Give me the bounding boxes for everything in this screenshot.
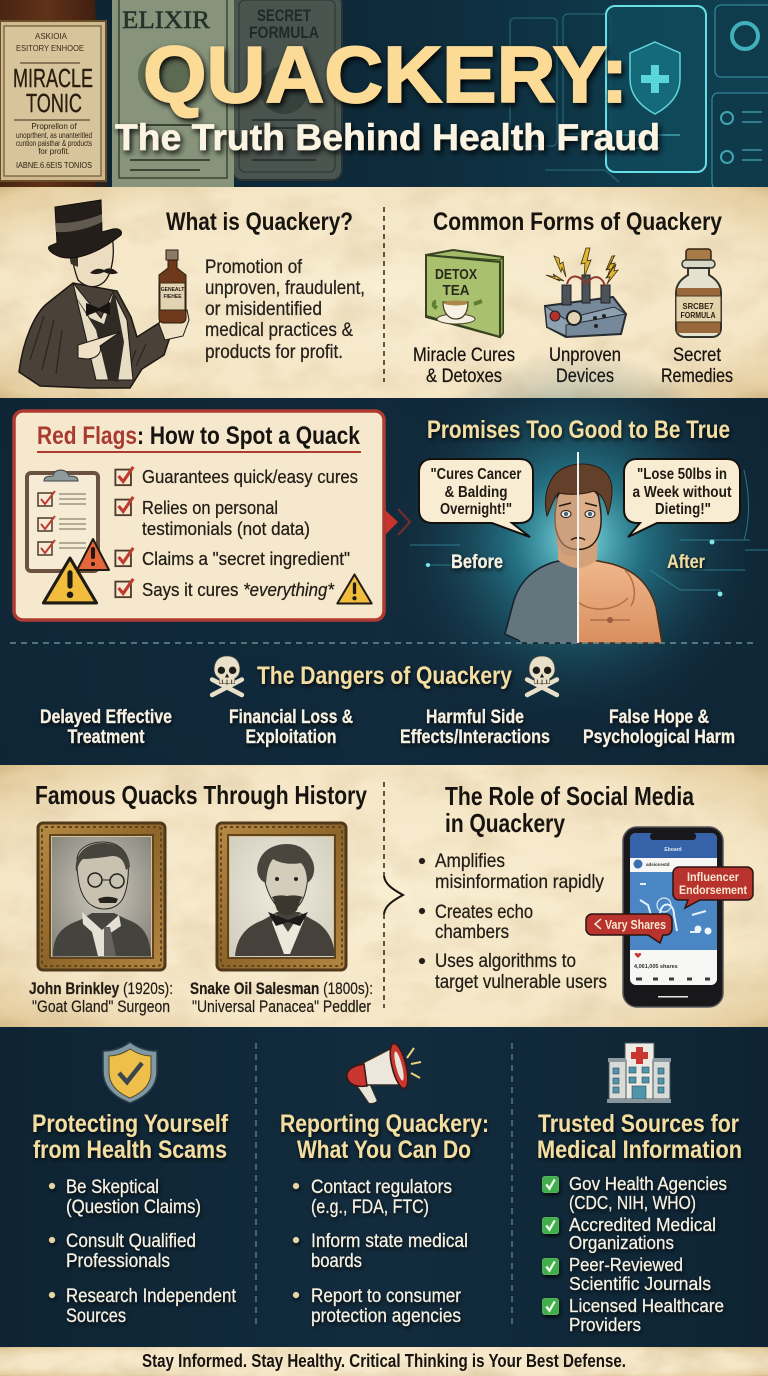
bottle: miracle tonic: IABNE.6.6EIS TONIOS (16, 161, 92, 170)
label: miracle cures: Miracle Cures (413, 344, 515, 366)
phone mockup: 4,061,005 shares (634, 964, 678, 970)
icon: top-hatted salesman holding tonic (19, 200, 189, 388)
social media bullets (419, 851, 607, 993)
trusted sources list: Scientific Journals (569, 1273, 711, 1294)
protection list: Research Independent (66, 1286, 237, 1307)
column: trusted sources (537, 1043, 742, 1335)
trusted sources list: Organizations (569, 1232, 674, 1253)
heading: red flags: Red Flags (37, 422, 137, 450)
bottle: miracle tonic: ESITORY ENHOOE (16, 44, 84, 53)
checklist: Says it cures *everything* (142, 579, 335, 600)
footer banner (0, 1347, 768, 1376)
reporting list: (e.g., FDA, FTC) (311, 1197, 429, 1218)
label: secret remedies: Secret (673, 344, 721, 366)
heading: common forms: Common Forms of Quackery (433, 208, 722, 236)
figure: before and after man (505, 464, 662, 643)
label: unproven devices (549, 344, 621, 387)
heading: what is quackery: What is Quackery? (166, 208, 353, 236)
speech bubble: after claim: Dieting!" (655, 501, 711, 518)
definition text: unproven, fraudulent, (205, 278, 365, 299)
icon: secret formula jar: FORMULA (680, 311, 716, 320)
definition text: medical practices & (205, 320, 353, 341)
label: secret remedies (661, 344, 733, 387)
trusted sources list: Providers (569, 1314, 641, 1335)
icon: tonic bottle: GENEALT (161, 287, 184, 293)
speech bubble: after claim: "Lose 50lbs in (637, 466, 727, 483)
heading: dangers: The Dangers of Quackery (257, 662, 512, 690)
card: red flags (14, 411, 384, 620)
danger: side effects (400, 707, 550, 748)
trusted sources list: Accredited Medical (569, 1214, 716, 1235)
speech bubble: after claim: a Week without (632, 484, 732, 501)
bottle: miracle tonic: cuntion paisthar & products (16, 139, 92, 148)
label: miracle cures: & Detoxes (426, 365, 502, 387)
arrow: red flags to promises (385, 509, 410, 535)
heading: protecting yourself: Protecting Yourself (32, 1110, 229, 1138)
icon: megaphone (347, 1042, 421, 1103)
social media bullets: Creates echo (435, 902, 533, 923)
icon: warning triangle (337, 574, 372, 604)
icon: detox tea box (426, 250, 503, 337)
trusted sources list: Peer-Reviewed (569, 1254, 683, 1275)
caption: john brinkley (29, 979, 173, 1016)
speech bubble: before claim: Overnight!" (440, 501, 512, 518)
definition text: Promotion of (205, 257, 303, 278)
heading: protecting yourself (32, 1110, 229, 1164)
speech bubble: before claim: "Cures Cancer (430, 466, 522, 483)
portrait: john brinkley (38, 823, 165, 970)
protection list: Be Skeptical (66, 1177, 159, 1198)
definition text: or misidentified (205, 299, 322, 320)
icon: skull left (212, 656, 242, 695)
protection list: Professionals (66, 1251, 170, 1272)
trusted sources list (542, 1173, 727, 1335)
badge: vary shares: Vary Shares (605, 918, 666, 932)
phone mockup: adsiocestd (646, 862, 670, 867)
danger: financial loss: Financial Loss & (229, 707, 353, 728)
subtitle: The Truth Behind Health Fraud (115, 117, 660, 158)
column: protecting yourself (32, 1042, 237, 1327)
label: after: After (667, 552, 706, 573)
speech bubble: before claim: & Balding (444, 484, 508, 501)
label: secret remedies: Remedies (661, 365, 733, 387)
caption: john brinkley: John Brinkley (1920s): (29, 979, 173, 998)
right digital health panels (510, 5, 768, 189)
main title: QUACKERY: (143, 30, 628, 119)
bottle: miracle tonic: ASKIOIA (35, 32, 68, 41)
danger: delayed treatment (40, 707, 172, 748)
heading: red flags: : How to Spot a Quack (137, 422, 360, 450)
bottle: elixir (112, 0, 234, 187)
bottle: miracle tonic: TONIC (26, 88, 82, 118)
heading: trusted sources: Medical Information (537, 1136, 742, 1164)
icon: shield (103, 1042, 157, 1103)
footer message: Stay Informed. Stay Healthy. Critical Thinking is Your Best Defense. (142, 1351, 626, 1371)
badge: influencer endorsement: Influencer (687, 872, 739, 884)
speech bubble: after claim (624, 459, 740, 537)
dangers heading with skulls (212, 656, 557, 695)
panel: red flags and promises (0, 350, 768, 765)
reporting list: boards (311, 1251, 362, 1272)
caption: snake oil salesman: Snake Oil Salesman (1800s): (190, 979, 373, 998)
danger: delayed treatment: Delayed Effective (40, 707, 172, 728)
caption: snake oil salesman: "Universal Panacea" Peddler (192, 997, 371, 1016)
danger: side effects: Effects/Interactions (400, 727, 550, 748)
protection list: Consult Qualified (66, 1231, 196, 1252)
icon: skull right (527, 656, 557, 695)
label: unproven devices: Devices (556, 365, 614, 387)
portrait: snake oil salesman (217, 823, 346, 970)
trusted sources list: (CDC, NIH, WHO) (569, 1192, 696, 1213)
heading: role of social media: The Role of Social Media (445, 781, 694, 811)
icon: tonic bottle: FIEHEE (163, 294, 182, 300)
header banner (0, 0, 768, 189)
phone mockup (623, 827, 723, 1007)
checklist: Relies on personal (142, 497, 278, 518)
trusted sources list: Licensed Healthcare (569, 1295, 724, 1316)
phone mockup: Eboard (664, 847, 682, 853)
danger: financial loss: Exploitation (246, 727, 336, 748)
icon: electric quack device (545, 248, 626, 337)
bottle: secret formula: FORMULA (249, 23, 319, 42)
heading: red flags (37, 422, 361, 452)
definition text: products for profit. (205, 342, 343, 363)
heading: reporting quackery: Reporting Quackery: (280, 1110, 489, 1138)
reporting list (293, 1177, 468, 1327)
arrow: divider chevron (383, 782, 385, 1008)
heading: role of social media: in Quackery (445, 808, 565, 838)
danger: side effects: Harmful Side (426, 707, 524, 728)
reporting list: Contact regulators (311, 1177, 452, 1198)
social media bullets: misinformation rapidly (435, 872, 604, 893)
heading: famous quacks: Famous Quacks Through History (35, 780, 367, 810)
reporting list: protection agencies (311, 1306, 461, 1327)
caption: john brinkley: "Goat Gland" Surgeon (32, 997, 170, 1016)
panel: what is quackery and common forms (0, 187, 768, 398)
icon: secret formula jar: SRCBE7 (682, 302, 714, 311)
social media bullets: target vulnerable users (435, 972, 607, 993)
icon: detox tea box: DETOX (435, 266, 477, 283)
definition text (205, 257, 365, 363)
danger: false hope: Psychological Harm (583, 727, 735, 748)
badge: vary shares (586, 914, 672, 943)
column: reporting quackery (280, 1042, 489, 1327)
heading: reporting quackery (280, 1110, 489, 1164)
bottle: miracle tonic (0, 0, 108, 187)
heading: trusted sources: Trusted Sources for (538, 1110, 739, 1138)
checklist: testimonials (not data) (142, 518, 310, 539)
reporting list: Inform state medical (311, 1231, 468, 1252)
social media bullets: chambers (435, 922, 509, 943)
reporting list: Report to consumer (311, 1286, 462, 1307)
icon: secret formula jar (676, 249, 721, 337)
badge: influencer endorsement (673, 867, 753, 908)
speech bubble: before claim (419, 459, 533, 537)
icon: clipboard with warnings (27, 470, 109, 603)
icon: detox tea box: TEA (442, 282, 470, 299)
icon: hospital (607, 1043, 671, 1103)
danger: delayed treatment: Treatment (68, 727, 145, 748)
panel: protection reporting and sources (0, 1027, 768, 1347)
left vintage bottles (0, 0, 342, 187)
protection list: (Question Claims) (66, 1197, 201, 1218)
trusted sources list: Gov Health Agencies (569, 1173, 727, 1194)
bottle: secret formula: SECRET (257, 6, 311, 25)
social media bullets: Uses algorithms to (435, 951, 576, 972)
bottle: miracle tonic: unoprthent, as unanteritled (16, 131, 92, 140)
bottle: secret formula (232, 0, 342, 180)
label: unproven devices: Unproven (549, 344, 621, 366)
protection list: Sources (66, 1306, 126, 1327)
label: miracle cures (413, 344, 515, 387)
label: before: Before (451, 552, 503, 573)
teal glow and circuit lines (388, 350, 768, 730)
heading: reporting quackery: What You Can Do (297, 1136, 471, 1164)
bottle: miracle tonic: for profit. (38, 147, 70, 156)
bottle: elixir: ELIXIR (122, 7, 210, 34)
protection list (49, 1177, 237, 1327)
danger: false hope: False Hope & (609, 707, 709, 728)
heading: role of social media (445, 781, 694, 838)
checklist: Claims a "secret ingredient" (142, 548, 350, 569)
bottle: miracle tonic: MIRACLE (13, 63, 93, 93)
heading: trusted sources (537, 1110, 742, 1164)
social media bullets: Amplifies (435, 851, 505, 872)
danger: false hope (583, 707, 735, 748)
badge: influencer endorsement: Endorsement (679, 885, 747, 897)
panel: famous quacks and social media (0, 765, 768, 1027)
caption: snake oil salesman (190, 979, 373, 1016)
checklist: Guarantees quick/easy cures (142, 466, 358, 487)
heading: protecting yourself: from Health Scams (33, 1136, 227, 1164)
danger: financial loss (229, 707, 353, 748)
bottle: miracle tonic: Proprellon of (31, 122, 77, 131)
checklist (115, 466, 358, 600)
icon: tonic bottle (159, 250, 186, 323)
